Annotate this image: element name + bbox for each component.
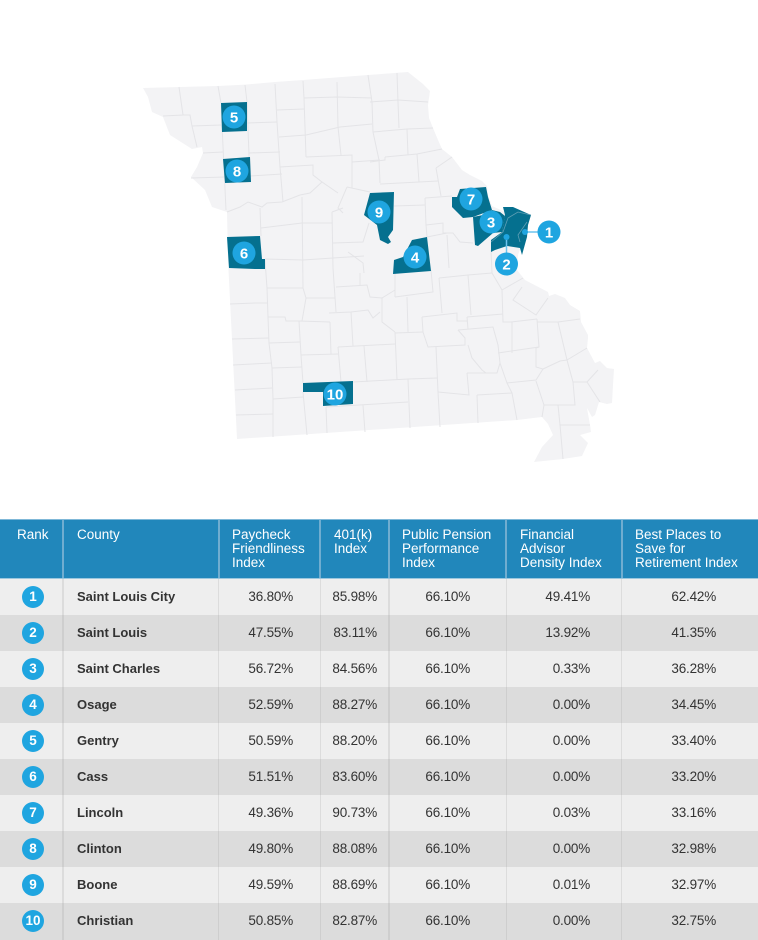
row 3: 56.72% [248,661,293,676]
header: financial advisor: Density Index [520,555,602,570]
map: Missouri counties [143,72,614,462]
row 4: 4 [29,697,37,712]
row 5: Gentry [77,733,119,748]
header: 401(k): Index [334,541,367,556]
highlighted county: Lincoln [452,187,492,218]
marker 5: 5 [230,110,238,126]
row 3: 66.10% [425,661,470,676]
row 8: 49.80% [248,841,293,856]
row 3: 0.33% [553,661,590,676]
row 9: 9 [29,877,37,892]
row 4 [0,687,758,723]
row 2: 41.35% [671,625,716,640]
row 1: 1 [29,589,37,604]
marker 2 with leader: 2 [502,256,511,274]
row 4: 52.59% [248,697,293,712]
marker 8: 8 [233,164,241,180]
marker 1 with leader [522,220,560,244]
row 7 [0,795,758,831]
row 9: Boone [77,877,117,892]
row 3: Saint Charles [77,661,160,676]
header: paycheck friendliness: Index [232,555,265,570]
row 1 [0,579,758,615]
row 4: 88.27% [332,697,377,712]
row 8: 32.98% [671,841,716,856]
row 10: 10 [25,913,41,928]
row 6: 66.10% [425,769,470,784]
row 7: 0.03% [553,805,590,820]
state outline [143,72,614,462]
row 1: 62.42% [671,589,716,604]
row 5: 88.20% [332,733,377,748]
county borders [163,73,600,459]
marker 4 [404,246,426,268]
row 9 [0,867,758,903]
row 5: 66.10% [425,733,470,748]
row 7: 7 [29,805,37,820]
row 2: 83.11% [333,625,377,640]
header: public pension: Public Pension [402,527,491,542]
marker 10 [324,382,346,406]
row 7: 33.16% [671,805,716,820]
marker 1 with leader: 1 [545,224,553,242]
row 9: 0.01% [553,877,590,892]
header: public pension: Index [402,555,435,570]
marker 4: 4 [411,250,420,266]
row 1: 66.10% [425,589,470,604]
marker 8 [226,160,248,182]
row 2: 2 [29,625,37,640]
row 5: 5 [29,733,37,748]
row 8: 88.08% [332,841,377,856]
row 4: 34.45% [671,697,716,712]
header: paycheck friendliness [232,527,305,570]
row 1: 49.41% [545,589,590,604]
row 8: 66.10% [425,841,470,856]
row 2 [0,615,758,651]
table header [0,519,758,579]
marker 9 [368,200,390,224]
marker 7 [460,188,482,210]
row 8 [0,831,758,867]
highlighted county: Cass [227,236,265,269]
table: county rankings [0,519,758,940]
row 8: 8 [29,841,37,856]
row 3: 3 [29,661,37,676]
header: public pension: Performance [402,541,479,556]
row 2: Saint Louis [77,625,147,640]
highlighted county: Saint Charles [473,210,505,246]
row 6: 6 [29,769,37,784]
row 1: 85.98% [332,589,377,604]
header: county: County [77,527,120,542]
row 5: 50.59% [248,733,293,748]
header: 401(k) [334,527,372,556]
row 4: 0.00% [553,697,590,712]
row 5 [0,723,758,759]
header: best places: Retirement Index [635,555,738,570]
row 10: 0.00% [553,913,590,928]
row 10: Christian [77,913,133,928]
row 9: 66.10% [425,877,470,892]
header: paycheck friendliness: Paycheck [232,527,291,542]
row 10: 32.75% [671,913,716,928]
header: best places: Save for [635,541,685,556]
row 5: 0.00% [553,733,590,748]
marker 6 [232,242,256,264]
row 1: Saint Louis City [77,589,175,604]
row 6 [0,759,758,795]
row 6: Cass [77,769,108,784]
header: best places [635,527,738,570]
row 4: 66.10% [425,697,470,712]
header: rank: Rank [17,527,49,542]
header: financial advisor [520,527,602,570]
row 5: 33.40% [671,733,716,748]
marker 10: 10 [327,386,343,404]
row 4: Osage [77,697,117,712]
row 7: 90.73% [332,805,377,820]
row 10: 66.10% [425,913,470,928]
row 7: Lincoln [77,805,123,820]
row 8: 0.00% [553,841,590,856]
header: public pension [402,527,491,570]
header: financial advisor: Financial [520,527,574,542]
header: paycheck friendliness: Friendliness [232,541,305,556]
highlighted county: Osage [393,237,431,274]
marker 5 [222,106,246,128]
marker 6: 6 [240,246,248,262]
row 3: 36.28% [671,661,716,676]
highlighted county: Gentry [221,102,247,132]
marker 3: 3 [487,214,495,232]
row 6: 83.60% [332,769,377,784]
highlighted county: Christian [303,381,353,406]
row 8: Clinton [77,841,122,856]
row 2: 66.10% [425,625,470,640]
row 3 [0,651,758,687]
row 7: 66.10% [425,805,470,820]
header: financial advisor: Advisor [520,541,565,556]
row 6: 33.20% [671,769,716,784]
marker 9: 9 [375,204,383,222]
marker 3 [480,210,502,234]
marker 2 with leader [495,234,518,276]
row 3: 84.56% [332,661,377,676]
row 2: 47.55% [248,625,293,640]
highlighted county: Clinton [223,157,251,183]
highlighted counties: Saint Louis and Saint Louis City [491,207,531,255]
header: 401(k): 401(k) [334,527,372,542]
highlighted county: Boone [364,192,394,244]
row 7: 49.36% [248,805,293,820]
row 9: 88.69% [332,877,377,892]
row 6: 0.00% [553,769,590,784]
row 6: 51.51% [248,769,293,784]
row 10 [0,903,758,940]
row 9: 49.59% [248,877,293,892]
marker 7: 7 [467,192,475,208]
row 2: 13.92% [545,625,590,640]
row 10: 82.87% [332,913,377,928]
row 10: 50.85% [248,913,293,928]
row 1: 36.80% [248,589,293,604]
header: best places: Best Places to [635,527,721,542]
row 9: 32.97% [671,877,716,892]
